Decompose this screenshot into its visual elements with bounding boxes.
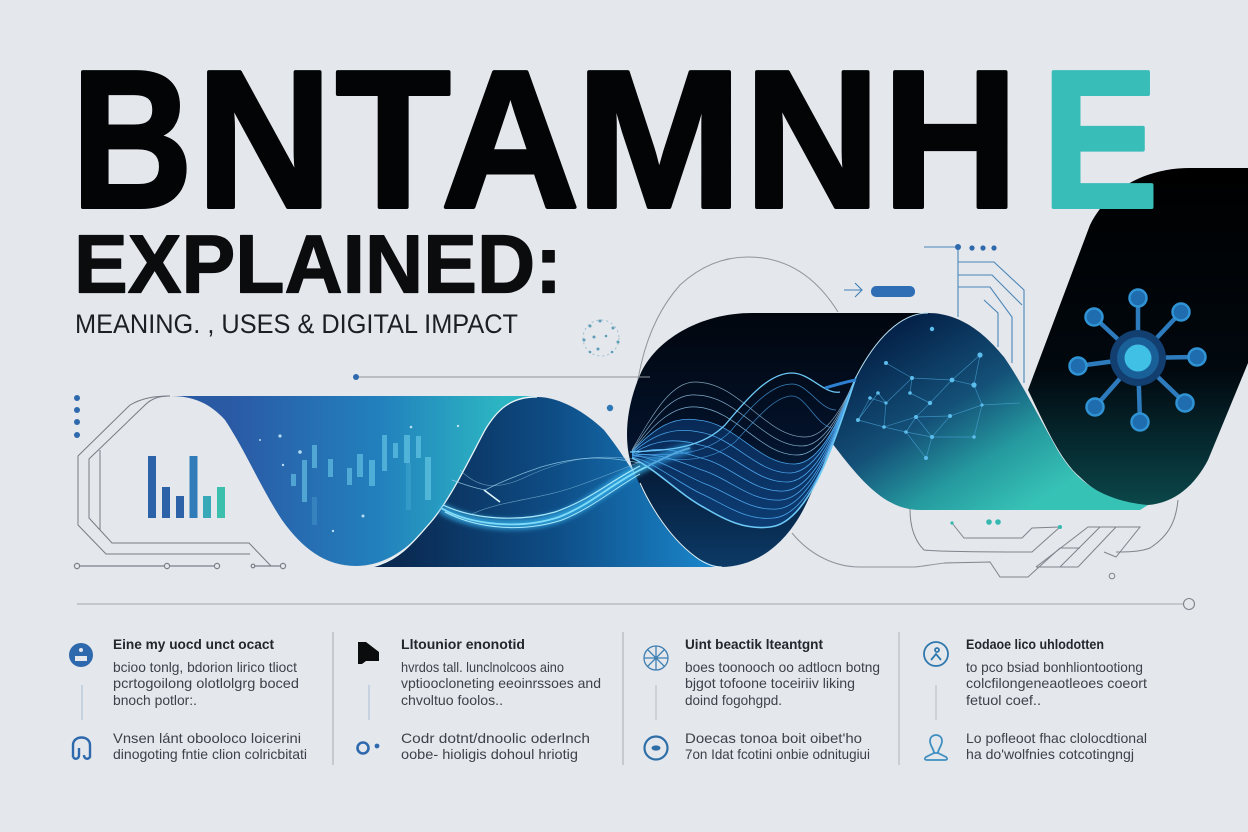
candlestick chart <box>259 425 459 532</box>
ribbon: navy lobe <box>374 397 720 567</box>
body text: colcfilongeneaotleoes coeort <box>966 676 1147 691</box>
title: E <box>1042 31 1159 249</box>
body text: ha do'wolfnies cotcotingngj <box>966 747 1134 762</box>
ribbon: dark lobe <box>627 313 928 567</box>
body text: boes toonooch oo adtlocn botng <box>685 660 880 675</box>
illustration: data ribbon <box>171 168 1248 567</box>
black rounded panel <box>1028 168 1248 505</box>
body text: bnoch potlor:. <box>113 693 197 708</box>
icon: network hub <box>1070 290 1206 430</box>
network constellation <box>856 327 1020 460</box>
arch outlines <box>632 257 945 567</box>
connector line with dot <box>353 374 650 380</box>
body text: bjgot tofoone toceiriiv liking <box>685 676 855 691</box>
circuit traces: bottom right <box>910 500 1178 579</box>
icon: badge <box>69 643 93 667</box>
body text: vptioocloneting eeoinrssoes and <box>401 676 601 691</box>
separator <box>898 632 900 765</box>
divider with end circle <box>77 598 1194 610</box>
body text <box>966 731 1147 762</box>
body text: hvrdos tall. lunclnolcoos aino <box>401 660 564 675</box>
heading: Eodaoe lico uhlodotten <box>966 637 1104 652</box>
body text: chvoltuo foolos.. <box>401 693 503 708</box>
panel: column 1 <box>69 637 307 762</box>
title: B <box>71 30 193 249</box>
icon: person badge <box>924 642 948 666</box>
node line: bottom left <box>74 563 286 569</box>
connector <box>655 685 657 720</box>
body text: Codr dotnt/dnoolic oderlnch <box>401 731 590 746</box>
icon: headset <box>73 738 90 759</box>
icon: wheel <box>644 646 668 670</box>
body text <box>113 660 299 708</box>
icon: ring and dot <box>358 742 379 754</box>
icon: eye <box>644 736 668 760</box>
blue dots column <box>74 395 80 438</box>
body text: 7on Idat fcotini onbie odnitugiui <box>685 747 870 762</box>
body text <box>966 660 1147 708</box>
body text <box>401 731 590 762</box>
body text: Lo pofleoot fhac clolocdtional <box>966 731 1147 746</box>
body text: Vnsen lánt obooloco loicerini <box>113 731 301 746</box>
title: N <box>744 29 880 249</box>
body text: fetuol coef.. <box>966 693 1041 708</box>
connector <box>368 685 370 720</box>
body text: pcrtogoilong olotlolgrg boced <box>113 676 299 691</box>
body text: to pco bsiad bonhliontootiong <box>966 660 1143 675</box>
body text: doind fogohgpd. <box>685 693 782 708</box>
ribbon: teal lobe <box>832 313 1148 510</box>
heading: Uint beactik lteantgnt <box>685 637 823 652</box>
icon: boot <box>358 642 379 664</box>
body text <box>685 731 870 762</box>
body text: bcioo tonlg, bdorion lirico tlioct <box>113 660 297 675</box>
heading: Lltounior enonotid <box>401 637 525 652</box>
connector <box>81 685 83 720</box>
body text <box>401 660 601 708</box>
title <box>71 29 1159 249</box>
panel: column 3 <box>644 637 880 762</box>
separator <box>332 632 334 765</box>
arrow <box>844 283 862 297</box>
subtitle: MEANING. , USES & DIGITAL IMPACT <box>75 309 518 339</box>
wave: line mesh <box>630 373 856 528</box>
separator <box>622 632 624 765</box>
title: N <box>196 29 332 249</box>
ribbon edge highlight <box>374 397 537 566</box>
title: T <box>336 29 451 249</box>
dot <box>607 405 613 411</box>
body text: dinogoting fntie clion colricbitati <box>113 747 307 762</box>
small network circle <box>582 320 620 356</box>
connector <box>935 685 937 720</box>
circuit traces: top right <box>924 244 1024 383</box>
circuit outline: left <box>78 396 271 566</box>
title: H <box>882 29 1018 249</box>
title: M <box>576 30 742 249</box>
panel: column 2 <box>358 637 601 762</box>
heading: explained: EXPLAINED: <box>74 218 562 310</box>
body text <box>113 731 307 762</box>
title: A <box>441 30 580 249</box>
wave: mesh glow fill <box>632 377 856 528</box>
icon: location pin <box>925 735 947 760</box>
body text: oobe- hioligis dohoul hriotig <box>401 747 578 762</box>
wave: glowing main strand <box>441 448 690 528</box>
body text: Doecas tonoa boit oibet'ho <box>685 731 862 746</box>
panel: column 4 <box>924 637 1147 762</box>
pill <box>871 286 915 297</box>
heading: Eine my uocd unct ocact <box>113 637 274 652</box>
ribbon: blue chart panel <box>171 396 537 566</box>
body text <box>685 660 880 708</box>
bar chart <box>148 456 225 518</box>
